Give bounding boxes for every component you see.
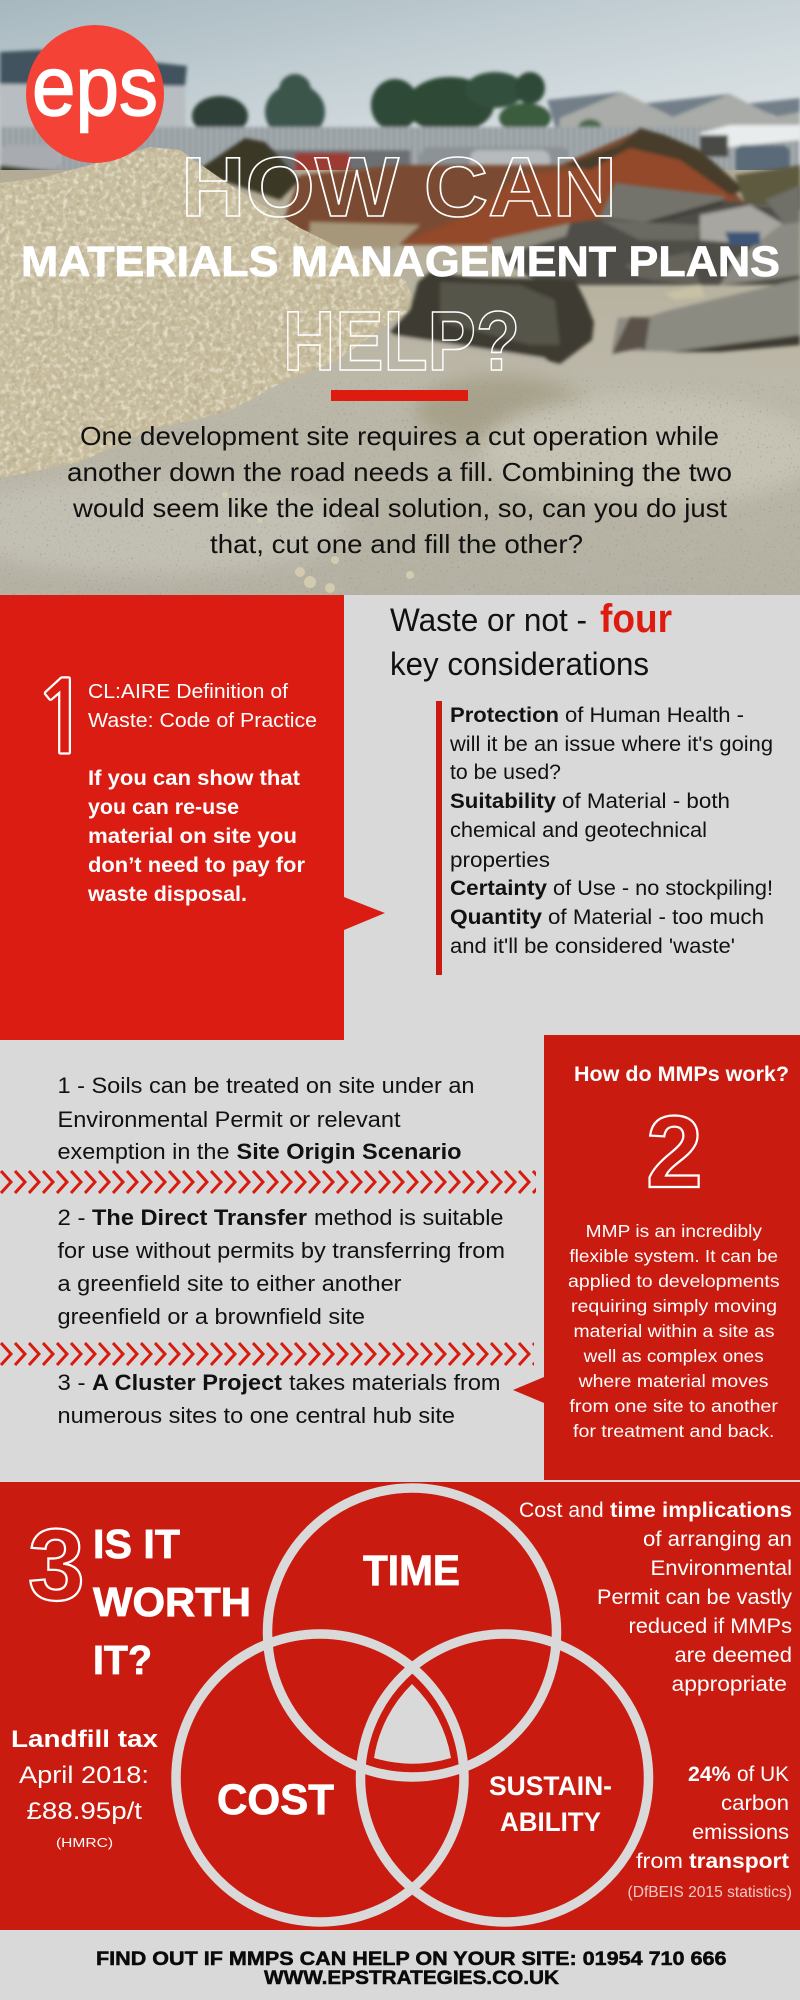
venn label: cost: COST	[217, 1776, 334, 1824]
heading: waste or not: key considerations	[390, 646, 649, 682]
MMP method 1: site origin scenario: exemption in the	[58, 1139, 230, 1164]
panel 1 bold statement: waste disposal.	[87, 883, 247, 906]
time implications text: reduced if MMPs	[628, 1615, 792, 1638]
panel 1 bold statement: If you can show that	[88, 767, 300, 790]
panel 2 description: requiring simply moving	[571, 1296, 777, 1316]
MMP method 1: site origin scenario: Environmental Permit or relevant	[58, 1107, 400, 1132]
photo: scattered stones	[222, 492, 414, 593]
photo: digger bucket	[388, 272, 594, 365]
numeral 3: 3	[28, 1508, 85, 1622]
panel 2 description: well as complex ones	[583, 1346, 764, 1366]
panel 1 heading	[88, 681, 317, 732]
time implications text: Environmental	[650, 1557, 792, 1580]
venn label: sustainability: ABILITY	[500, 1807, 601, 1837]
venn circle: sustainability	[360, 1634, 648, 1922]
hero photo: construction site	[0, 0, 800, 595]
footer call to action	[96, 1949, 726, 1989]
logo: eps red circle	[26, 25, 164, 163]
intro paragraph: One development site requires a cut operation while	[80, 421, 719, 451]
panel 1 heading: Waste: Code of Practice	[88, 710, 317, 732]
venn label: sustainability	[489, 1771, 612, 1837]
carbon emissions text: of UK	[737, 1763, 789, 1786]
four considerations list: of Use - no stockpiling!	[553, 877, 773, 900]
MMP method 1: site origin scenario: 1 - Soils can be treated on site under an	[58, 1073, 474, 1098]
MMP method 2: direct transfer: method is suitable	[314, 1205, 504, 1230]
photo: sky	[0, 0, 800, 160]
panel 2 heading: How do MMPs work?	[574, 1063, 789, 1086]
panel 2 description: where material moves	[577, 1371, 769, 1391]
carbon emissions text	[628, 1763, 792, 1901]
photo: gravel pile	[0, 147, 418, 478]
venn centre overlap	[374, 1684, 451, 1764]
MMP method 2: direct transfer: 2 -	[58, 1205, 86, 1230]
panel 3 heading: IS IT	[93, 1521, 180, 1567]
four considerations list: and it'll be considered 'waste'	[450, 935, 735, 958]
title line: help: HELP?	[283, 294, 520, 388]
intro paragraph	[67, 421, 732, 559]
landfill tax text	[11, 1726, 159, 1850]
panel 3: is it worth it	[0, 1482, 800, 1930]
venn circle: cost	[176, 1634, 464, 1922]
panel 1 bold statement: material on site you	[88, 825, 297, 848]
MMP method 1: site origin scenario: Site Origin Scenario	[236, 1139, 462, 1164]
four considerations list: of Human Health -	[565, 704, 744, 727]
intro paragraph: another down the road needs a fill. Combining the two	[67, 457, 732, 487]
panel 3 background	[0, 1482, 800, 1930]
heading: waste or not	[390, 597, 672, 682]
venn diagram	[176, 1488, 648, 1922]
carbon emissions text: (DfBEIS 2015 statistics)	[628, 1884, 792, 1901]
MMP method 2: direct transfer: a greenfield site to either another	[58, 1271, 402, 1296]
venn label: time: TIME	[363, 1547, 460, 1595]
panel 2 description: flexible system. It can be	[569, 1246, 778, 1266]
MMP method 1: site origin scenario	[58, 1073, 474, 1164]
landfill tax text: Landfill tax	[11, 1726, 159, 1753]
heading: waste or not: Waste or not -	[390, 602, 587, 638]
time implications text: appropriate	[672, 1673, 787, 1696]
four considerations list: chemical and geotechnical	[450, 819, 707, 842]
vertical red bar	[436, 701, 442, 975]
MMP method 3: cluster project: 3 -	[58, 1370, 86, 1395]
photo: wet ground	[0, 170, 800, 595]
MMP method 2: direct transfer: for use without permits by transferring from	[58, 1238, 505, 1263]
MMP method 3: cluster project: A Cluster Project	[92, 1370, 283, 1395]
title line: materials management plans: MATERIALS MANAGEMENT PLANS	[21, 238, 780, 286]
four considerations list: will it be an issue where it's going	[449, 733, 773, 756]
panel 1: CL:AIRE definition of waste	[0, 595, 385, 1040]
time implications text: of arranging an	[643, 1528, 792, 1551]
MMP method 2: direct transfer: The Direct Transfer	[92, 1205, 307, 1230]
chevron divider 2	[0, 1342, 534, 1366]
four considerations list	[449, 704, 773, 958]
panel 2 background with arrow	[513, 1035, 800, 1480]
MMP method 2: direct transfer	[58, 1205, 505, 1329]
MMP method 3: cluster project: numerous sites to one central hub site	[58, 1403, 455, 1428]
four considerations list: to be used?	[450, 761, 561, 784]
panel 2 description: for treatment and back.	[573, 1421, 774, 1441]
footer call to action: WWW.EPSTRATEGIES.CO.UK	[264, 1968, 559, 1989]
panel 1 background with arrow	[0, 595, 385, 1040]
footer call to action: FIND OUT IF MMPS CAN HELP ON YOUR SITE: 01954 710 666	[96, 1949, 726, 1970]
chevron divider 1	[0, 1170, 536, 1194]
red title underline bar	[331, 390, 468, 401]
numeral 1: 1	[32, 669, 93, 768]
numeral 2: 2	[646, 1095, 703, 1209]
four considerations list: Quantity	[450, 906, 542, 929]
panel 2: how do MMPs work	[513, 1035, 800, 1480]
heading: waste or not: four	[600, 597, 672, 641]
landfill tax text: April 2018:	[19, 1762, 149, 1789]
carbon emissions text: carbon	[721, 1792, 789, 1815]
four considerations list: of Material - both	[562, 790, 730, 813]
logo: eps red circle: eps	[32, 39, 158, 133]
time implications text: Permit can be vastly	[597, 1586, 793, 1609]
time implications text: Cost and	[519, 1499, 604, 1522]
panel 2 description: material within a site as	[574, 1321, 775, 1341]
time implications text	[519, 1499, 793, 1696]
panel 3 heading: WORTH	[93, 1579, 251, 1625]
carbon emissions text: emissions	[692, 1821, 789, 1844]
panel 3 heading: IT?	[93, 1637, 152, 1683]
landfill tax text: £88.95p/t	[26, 1798, 142, 1825]
panel 2 description: applied to developments	[568, 1271, 780, 1291]
panel 2 description	[568, 1221, 780, 1441]
title block	[21, 140, 780, 388]
venn label: sustainability: SUSTAIN-	[489, 1771, 612, 1801]
panel 1 bold statement: you can re-use	[88, 796, 239, 819]
MMP method 3: cluster project: takes materials from	[289, 1370, 500, 1395]
venn circle: time	[268, 1488, 556, 1777]
photo: background site scenery	[0, 48, 800, 170]
carbon emissions text: from	[636, 1850, 683, 1873]
four considerations list: Protection	[450, 704, 559, 727]
four considerations list: of Material - too much	[548, 906, 764, 929]
four considerations list: Suitability	[450, 790, 556, 813]
panel 1 heading: CL:AIRE Definition of	[88, 681, 288, 703]
four considerations list: properties	[450, 849, 550, 872]
four considerations list: Certainty	[450, 877, 547, 900]
MMP method 3: cluster project	[58, 1370, 500, 1428]
landfill tax text: (HMRC)	[56, 1835, 113, 1850]
panel 1 bold statement	[87, 767, 305, 906]
panel 2 description: from one site to another	[569, 1396, 778, 1416]
time implications text: are deemed	[674, 1644, 792, 1667]
photo: concrete slabs and rubble	[490, 183, 800, 354]
page background	[0, 590, 800, 2000]
photo: soil heaps	[195, 128, 800, 250]
intro paragraph: that, cut one and fill the other?	[210, 529, 583, 559]
panel 3 heading	[93, 1521, 251, 1683]
intro paragraph: would seem like the ideal solution, so, can you do just	[72, 493, 728, 523]
panel 2 description: MMP is an incredibly	[586, 1221, 762, 1241]
carbon emissions text: transport	[689, 1850, 789, 1873]
time implications text: time implications	[610, 1499, 792, 1522]
carbon emissions text: 24%	[688, 1763, 731, 1786]
panel 1 bold statement: don’t need to pay for	[88, 854, 305, 877]
title line: how can: HOW CAN	[181, 140, 617, 234]
MMP method 2: direct transfer: greenfield or a brownfield site	[58, 1304, 365, 1329]
